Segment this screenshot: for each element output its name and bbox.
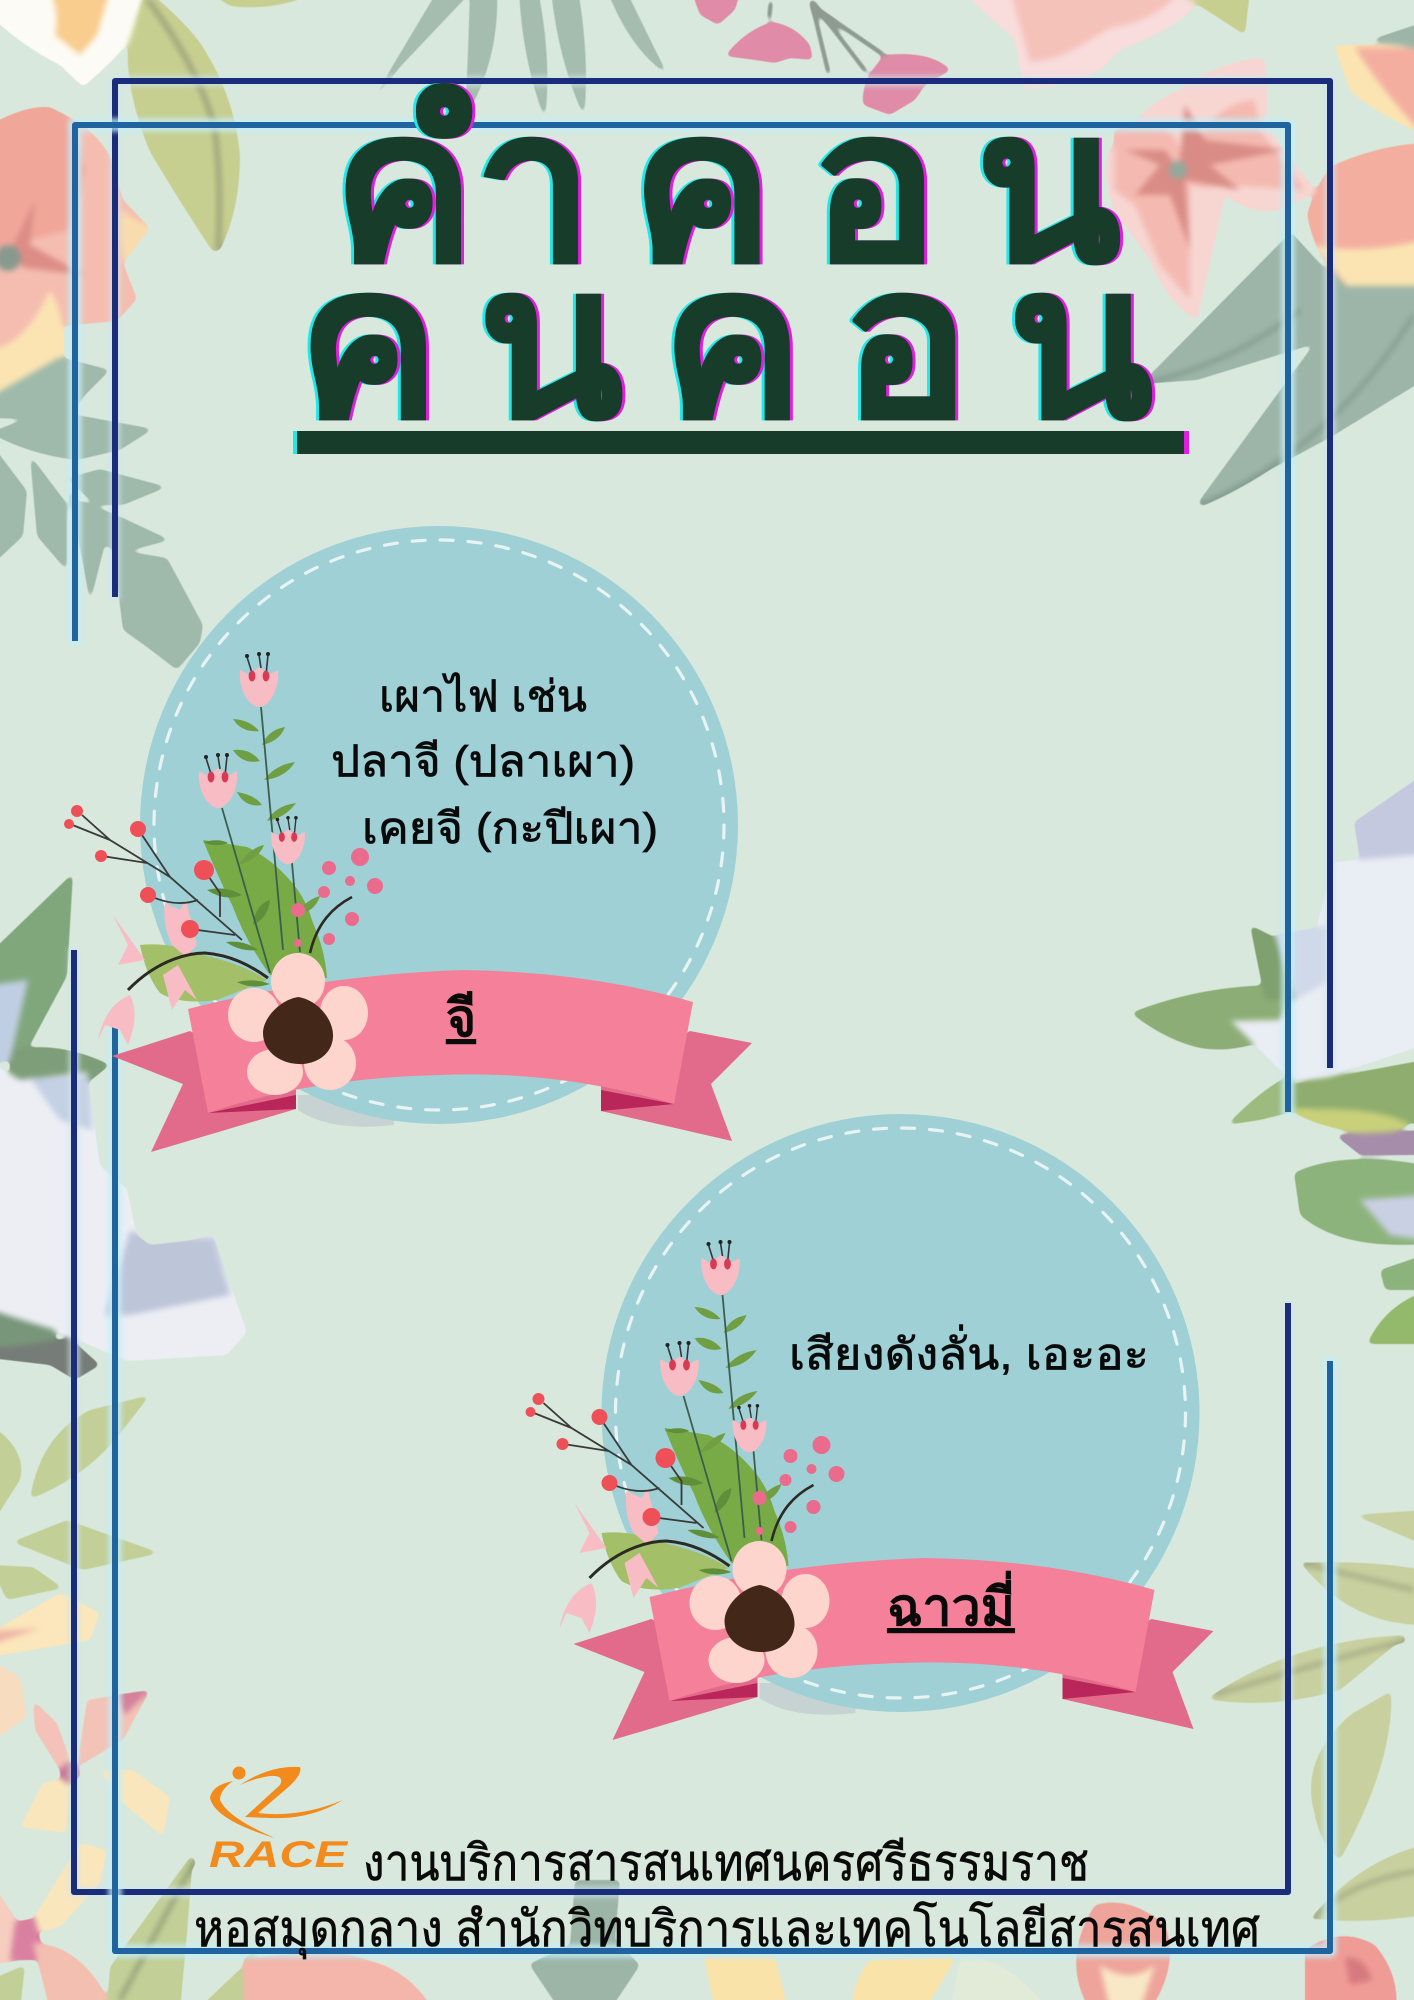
top-centre leaves	[365, 0, 668, 120]
ribbon word: ฉาวมี่	[887, 1571, 1015, 1637]
description text: เสียงดังลั่น, เอะอะ	[789, 1325, 1149, 1379]
panel: จี (burnt)	[64, 526, 752, 1152]
ribbon banner	[574, 1558, 1214, 1740]
footer text: งานบริการสารสนเทศนครศรีธรรมราช	[363, 1835, 1089, 1891]
ribbon banner	[112, 970, 752, 1152]
left fern	[0, 357, 203, 670]
top-left flower and leaf	[0, 0, 320, 252]
description text: เผาไฟ เช่น	[379, 672, 587, 721]
title: คนคอน	[298, 224, 1153, 461]
top-right pink flowers	[960, 0, 1317, 321]
blossom	[228, 953, 368, 1095]
teal circle	[602, 1114, 1200, 1715]
flower spray	[64, 652, 383, 1045]
lower-right olive leaves	[1207, 1510, 1414, 1921]
title	[293, 68, 1189, 461]
bottom plants	[107, 1853, 1397, 2000]
footer text: หอสมุดกลาง สำนักวิทบริการและเทคโนโลยีสารสนเทศ	[194, 1901, 1260, 1959]
teal circle	[140, 526, 738, 1127]
middle-left white flower and leaves	[0, 873, 247, 1380]
panel: ฉาวมี่ (noisy)	[526, 1114, 1214, 1740]
title: คำคอน	[333, 68, 1121, 305]
logo: RACE: RACE	[209, 1834, 349, 1875]
description text: เคยจี (กะปีเผา)	[362, 805, 658, 853]
blossom	[690, 1541, 830, 1683]
description text	[331, 672, 658, 853]
top pink bell flowers	[691, 0, 951, 115]
right leaves and orange flower	[1141, 22, 1414, 505]
footer text	[194, 1835, 1260, 1959]
middle-right white flower and leaves	[1131, 774, 1414, 1344]
lower-left olive leaves	[0, 1395, 160, 1600]
left pink flower	[0, 107, 150, 393]
lower-left peach flowers	[0, 1593, 170, 2000]
flower spray	[526, 1240, 844, 1633]
logo: RACE	[209, 1766, 349, 1875]
ribbon word: จี	[446, 990, 476, 1048]
description text: ปลาจี (ปลาเผา)	[331, 738, 635, 786]
